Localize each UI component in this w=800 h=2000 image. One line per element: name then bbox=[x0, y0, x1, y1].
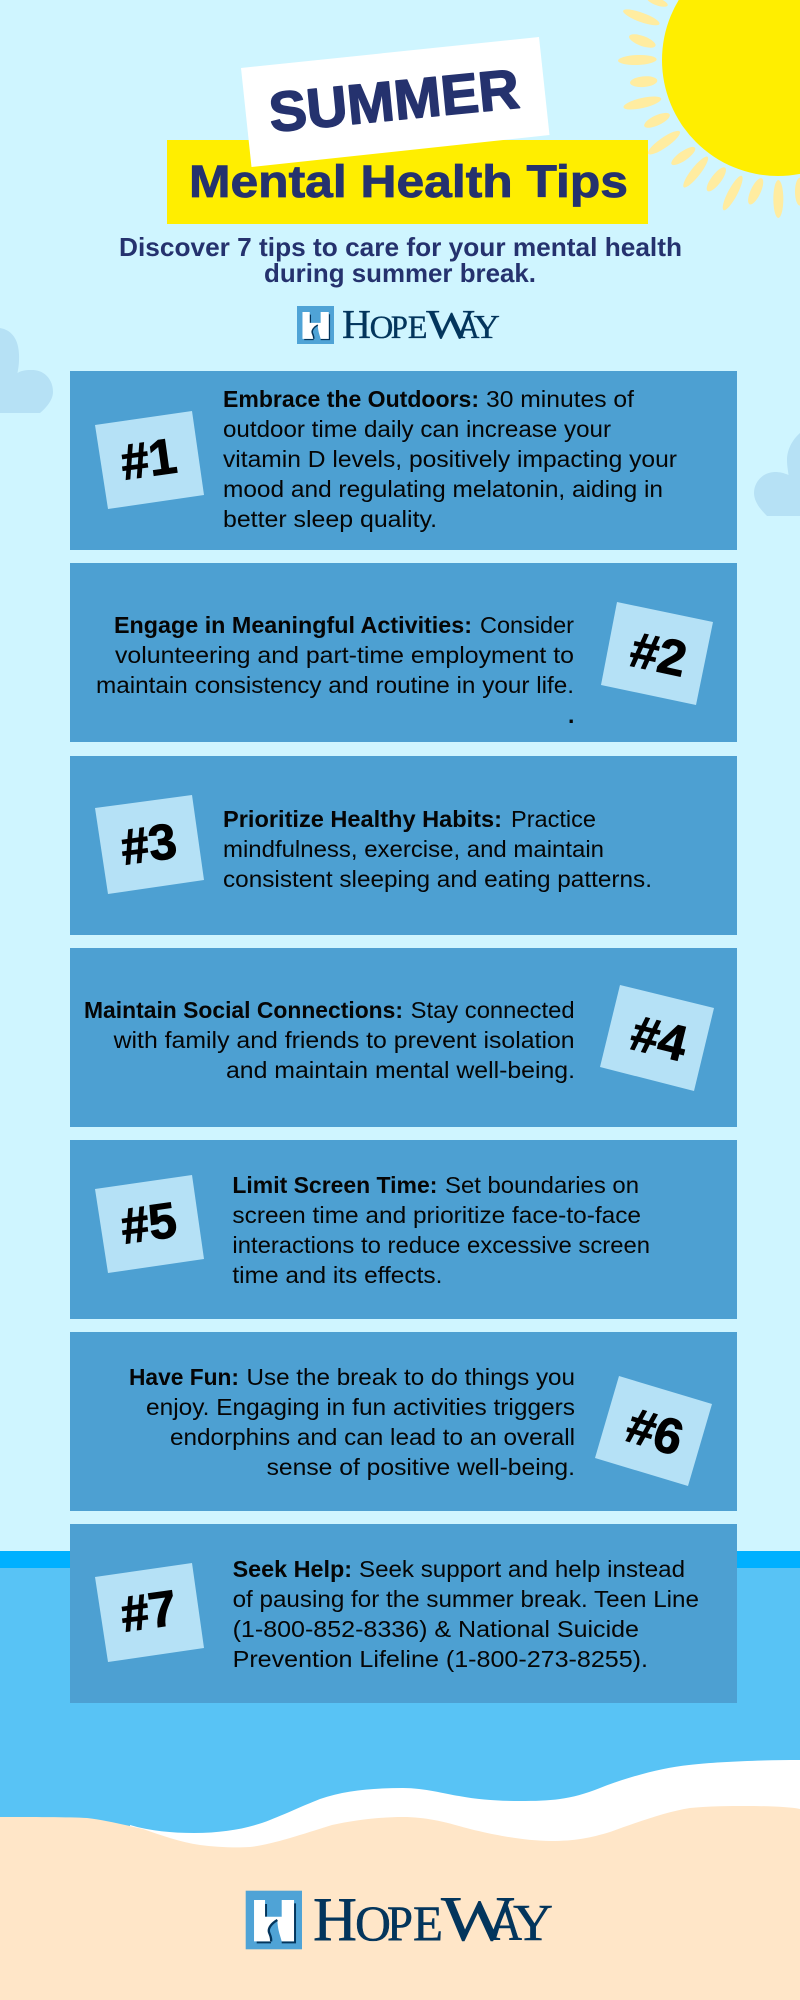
title: Mental Health Tips: Mental Health Tips bbox=[189, 156, 628, 207]
tip 1 text: mood and regulating melatonin, aiding in bbox=[223, 476, 663, 502]
yellow title banner bbox=[167, 140, 648, 224]
tip 5 text: screen time and prioritize face-to-face bbox=[232, 1202, 641, 1228]
tip 1 text: outdoor time daily can increase your bbox=[223, 416, 611, 442]
logo: HopeWay bottom: Y bbox=[513, 1895, 553, 1952]
logo: HopeWay bottom: O bbox=[355, 1895, 391, 1951]
badge #5: #5 bbox=[117, 1192, 180, 1255]
tip 6 text: enjoy. Engaging in fun activities triggers bbox=[146, 1394, 575, 1420]
logo: HopeWay bottom: W bbox=[441, 1884, 515, 1954]
tip 7 text bbox=[233, 1556, 699, 1672]
wave foam bbox=[130, 1760, 800, 1900]
badge #7: #7 bbox=[117, 1580, 180, 1643]
tip 2 text: maintain consistency and routine in your life. bbox=[96, 672, 574, 698]
tip 4 text: Stay connected bbox=[411, 997, 575, 1023]
tip 3 text: Prioritize Healthy Habits: bbox=[223, 806, 502, 832]
tip 1 text bbox=[223, 386, 677, 532]
panel: tip 2 bbox=[70, 563, 737, 742]
tip 5 text bbox=[232, 1172, 650, 1288]
badge #5 bbox=[95, 1175, 204, 1273]
logo: HopeWay bottom: H bbox=[313, 1886, 357, 1954]
title block bbox=[167, 37, 648, 224]
badge #3 bbox=[95, 795, 204, 894]
tip 6 text bbox=[129, 1364, 575, 1480]
tip 2 text: volunteering and part-time employment to bbox=[115, 642, 574, 668]
tip 7 text: of pausing for the summer break. Teen Line bbox=[233, 1586, 699, 1612]
ocean horizon band bbox=[0, 1551, 800, 1568]
logo: HopeWay bottom bbox=[246, 1884, 553, 1954]
icon: sun with rays bbox=[618, 0, 800, 218]
tip 6 text: Use the break to do things you bbox=[246, 1364, 575, 1390]
panel: tip 3 bbox=[70, 756, 737, 935]
ocean water bbox=[0, 1568, 800, 1908]
logo: HopeWay top: Y bbox=[474, 309, 500, 346]
tip 3 text bbox=[223, 806, 652, 892]
tip 2 text: Engage in Meaningful Activities: bbox=[114, 612, 472, 638]
tip 1 text: Embrace the Outdoors: bbox=[223, 386, 479, 412]
tip 7 text: Seek support and help instead bbox=[359, 1556, 685, 1582]
tip 5 text: Set boundaries on bbox=[445, 1172, 639, 1198]
logo: HopeWay bottom: E bbox=[413, 1895, 443, 1951]
logo: HopeWay top bbox=[297, 301, 500, 347]
icon: right cloud bbox=[754, 433, 800, 516]
tip 1 text: vitamin D levels, positively impacting your bbox=[223, 446, 677, 472]
logo: HopeWay top: H bbox=[342, 302, 371, 347]
badge #1 bbox=[95, 411, 204, 509]
tip 5 text: interactions to reduce excessive screen bbox=[232, 1232, 650, 1258]
tip 7 text: Prevention Lifeline (1-800-273-8255). bbox=[233, 1646, 648, 1672]
tip 6 text: endorphins and can lead to an overall bbox=[170, 1424, 575, 1450]
badge #4: #4 bbox=[625, 1005, 693, 1072]
panel: tip 6 bbox=[70, 1332, 737, 1511]
tip 2 text bbox=[96, 612, 574, 728]
badge #7 bbox=[95, 1563, 204, 1662]
panel: tip 7 bbox=[70, 1524, 737, 1703]
tip 7 text: (1-800-852-8336) & National Suicide bbox=[233, 1616, 639, 1642]
logo: HopeWay top: W bbox=[426, 301, 475, 347]
tip 4 text: and maintain mental well-being. bbox=[226, 1057, 575, 1083]
tip 6 text: sense of positive well-being. bbox=[267, 1454, 575, 1480]
tip 3 text: consistent sleeping and eating patterns. bbox=[223, 866, 652, 892]
tip 2 text: Consider bbox=[480, 612, 574, 638]
panel: tip 5 bbox=[70, 1140, 737, 1319]
logo: HopeWay top: E bbox=[408, 310, 428, 346]
tip 3 text: mindfulness, exercise, and maintain bbox=[223, 836, 604, 862]
badge #3: #3 bbox=[117, 813, 180, 876]
badge #1: #1 bbox=[117, 428, 180, 491]
logo: HopeWay top: P bbox=[391, 310, 408, 346]
tip 4 text: with family and friends to prevent isolation bbox=[113, 1027, 575, 1053]
tip 3 text: Practice bbox=[511, 806, 596, 832]
tip 5 text: time and its effects. bbox=[232, 1262, 442, 1288]
logo: HopeWay bottom: A bbox=[490, 1895, 522, 1952]
tip 6 text: Have Fun: bbox=[129, 1364, 239, 1390]
white tilted card bbox=[241, 37, 550, 167]
panel: tip 1 bbox=[70, 371, 737, 550]
logo: HopeWay bottom: P bbox=[387, 1895, 413, 1951]
tip 1 text: better sleep quality. bbox=[223, 506, 437, 532]
badge #4 bbox=[600, 985, 714, 1091]
icon: left cloud bbox=[0, 328, 53, 413]
badge #2: #2 bbox=[626, 621, 692, 688]
tip 4 text bbox=[84, 997, 575, 1083]
tip 1 text: 30 minutes of bbox=[486, 386, 635, 412]
subtitle: Discover 7 tips to care for your mental health bbox=[119, 232, 682, 262]
badge #6: #6 bbox=[620, 1397, 690, 1467]
tip 7 text: Seek Help: bbox=[233, 1556, 352, 1582]
badge #6 bbox=[595, 1376, 712, 1486]
sand beach bbox=[0, 1806, 800, 2000]
subtitle bbox=[119, 232, 682, 288]
tip 5 text: Limit Screen Time: bbox=[232, 1172, 437, 1198]
logo: HopeWay top: A bbox=[458, 309, 480, 346]
panel: tip 4 bbox=[70, 948, 737, 1127]
title: SUMMER: SUMMER bbox=[266, 57, 522, 144]
logo: HopeWay top: O bbox=[370, 310, 393, 346]
badge #2 bbox=[601, 602, 713, 705]
tip 4 text: Maintain Social Connections: bbox=[84, 997, 403, 1023]
subtitle: during summer break. bbox=[264, 258, 536, 288]
tip 2 text: . bbox=[568, 702, 574, 728]
